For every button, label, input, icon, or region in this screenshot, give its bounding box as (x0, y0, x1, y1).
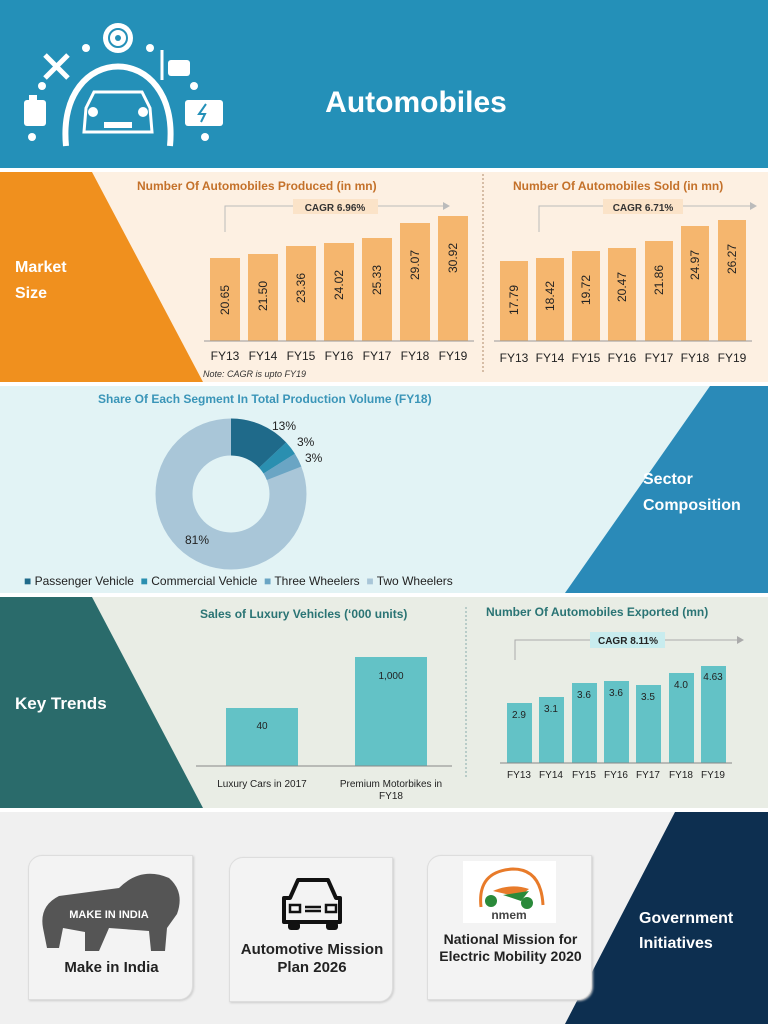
icon: lion (42, 874, 180, 951)
section label: sector composition: Composition (643, 497, 741, 514)
section label: market size: Market (15, 259, 67, 276)
chart: automobiles produced: 25.33 (370, 265, 384, 295)
chart: automobiles exported: FY16 (604, 770, 628, 781)
chart: automobiles produced: 30.92 (446, 243, 460, 273)
chart: automobiles sold: FY16 (608, 351, 637, 365)
donut chart: 13% (272, 419, 296, 433)
chart: automobiles sold: FY17 (645, 351, 674, 365)
chart: automobiles sold: FY19 (718, 351, 747, 365)
chart: automobiles sold: 21.86 (652, 265, 666, 295)
chart: automobiles sold: CAGR 6.71% (613, 203, 673, 214)
card: automotive mission plan: Automotive Mission (241, 941, 383, 958)
card: make in india: Make in India (64, 959, 159, 976)
icon: nmem logo (463, 861, 556, 923)
card: automotive mission plan: Plan 2026 (277, 959, 347, 976)
chart: luxury vehicle sales: Sales of Luxury Vehicles (‘000 units) (200, 607, 407, 621)
icon: automobile service emblem (24, 23, 223, 146)
chart: automobiles sold: 24.97 (688, 250, 702, 280)
section label: sector composition: Sector (643, 471, 693, 488)
chart: automobiles sold: FY15 (572, 351, 601, 365)
chart: automobiles sold: 17.79 (507, 285, 521, 315)
header banner (0, 0, 768, 168)
chart: automobiles sold: 19.72 (579, 275, 593, 305)
card: automotive mission plan (229, 857, 393, 1002)
chart: automobiles exported: FY19 (701, 770, 725, 781)
chart: luxury vehicle sales (196, 607, 452, 802)
chart: automobiles produced: FY16 (325, 349, 354, 363)
title: Automobiles (325, 86, 507, 119)
chart: automobiles exported: 3.6 (609, 688, 623, 699)
card: make in india (28, 855, 193, 1000)
chart: automobiles exported: FY17 (636, 770, 660, 781)
chart: automobiles exported: FY13 (507, 770, 531, 781)
icon: car (282, 878, 342, 930)
chart: automobiles produced: FY18 (401, 349, 430, 363)
chart: automobiles exported: FY18 (669, 770, 693, 781)
chart: automobiles exported: 4.0 (674, 680, 688, 691)
chart: automobiles produced: Number Of Automobiles Produced (in mn) (137, 179, 377, 193)
chart: automobiles produced: 24.02 (332, 270, 346, 300)
chart: automobiles exported: 3.6 (577, 690, 591, 701)
chart: automobiles produced: 29.07 (408, 250, 422, 280)
section label: sector composition (643, 471, 741, 514)
chart: automobiles exported (486, 605, 744, 781)
chart: automobiles produced: FY15 (287, 349, 316, 363)
chart: automobiles sold: FY18 (681, 351, 710, 365)
chart: automobiles sold: 18.42 (543, 281, 557, 311)
panel: market size (0, 172, 768, 382)
legend: ■ Passenger Vehicle ■ Commercial Vehicle ■ Three Wheelers ■ Two Wheelers (24, 574, 453, 588)
section label: government initiatives (639, 910, 733, 952)
card: electric mobility mission: Electric Mobility 2020 (439, 948, 582, 964)
chart: luxury vehicle sales: 40 (256, 721, 268, 732)
chart: automobiles produced: FY13 (211, 349, 240, 363)
chart: automobiles exported: FY14 (539, 770, 563, 781)
chart: automobiles sold: FY14 (536, 351, 565, 365)
chart: luxury vehicle sales: Luxury Cars in 2017 (217, 779, 307, 790)
chart: automobiles produced: FY17 (363, 349, 392, 363)
section label: market size: Size (15, 285, 47, 302)
chart: automobiles produced: Note: CAGR is upto FY19 (203, 369, 306, 379)
chart: automobiles exported: Number Of Automobiles Exported (mn) (486, 605, 708, 619)
chart: automobiles exported: 2.9 (512, 710, 526, 721)
chart: automobiles produced: 21.50 (256, 281, 270, 311)
chart: luxury vehicle sales: Premium Motorbikes in (340, 779, 442, 790)
chart: automobiles sold: 20.47 (615, 272, 629, 302)
chart: automobiles sold: FY13 (500, 351, 529, 365)
chart: automobiles produced: FY19 (439, 349, 468, 363)
section label: government initiatives: Government (639, 910, 733, 927)
chart: automobiles sold: 26.27 (725, 244, 739, 274)
donut chart: 81% (185, 533, 209, 547)
chart: automobiles produced: 20.65 (218, 285, 232, 315)
donut chart (156, 418, 323, 570)
section label: government initiatives: Initiatives (639, 935, 713, 952)
chart: luxury vehicle sales: 1,000 (378, 671, 404, 682)
donut chart: 3% (297, 435, 315, 449)
panel: key trends (0, 597, 768, 808)
chart: luxury vehicle sales: FY18 (379, 791, 403, 802)
chart: automobiles exported: 4.63 (703, 672, 723, 683)
chart: automobiles exported: 3.5 (641, 692, 655, 703)
chart: automobiles exported: CAGR 8.11% (598, 636, 658, 647)
chart: automobiles sold (494, 179, 757, 365)
chart: automobiles produced: 23.36 (294, 273, 308, 303)
chart: automobiles produced (137, 179, 474, 379)
chart title: segment share: Share Of Each Segment In Total Production Volume (FY18) (98, 392, 432, 406)
chart: automobiles exported: FY15 (572, 770, 596, 781)
section label: market size (15, 259, 67, 302)
chart: automobiles produced: FY14 (249, 349, 278, 363)
panel: government initiatives (0, 812, 768, 1024)
donut chart: 3% (305, 451, 323, 465)
icon: lion: MAKE IN INDIA (69, 909, 149, 921)
panel: sector composition (0, 386, 768, 593)
card: electric mobility mission (427, 855, 592, 1000)
section label: key trends: Key Trends (15, 694, 107, 713)
card: electric mobility mission: National Mission for (444, 931, 577, 947)
chart: automobiles sold: Number Of Automobiles Sold (in mn) (513, 179, 723, 193)
chart: automobiles produced: CAGR 6.96% (305, 203, 365, 214)
chart: automobiles exported: 3.1 (544, 704, 558, 715)
icon: nmem logo: nmem (491, 908, 527, 922)
